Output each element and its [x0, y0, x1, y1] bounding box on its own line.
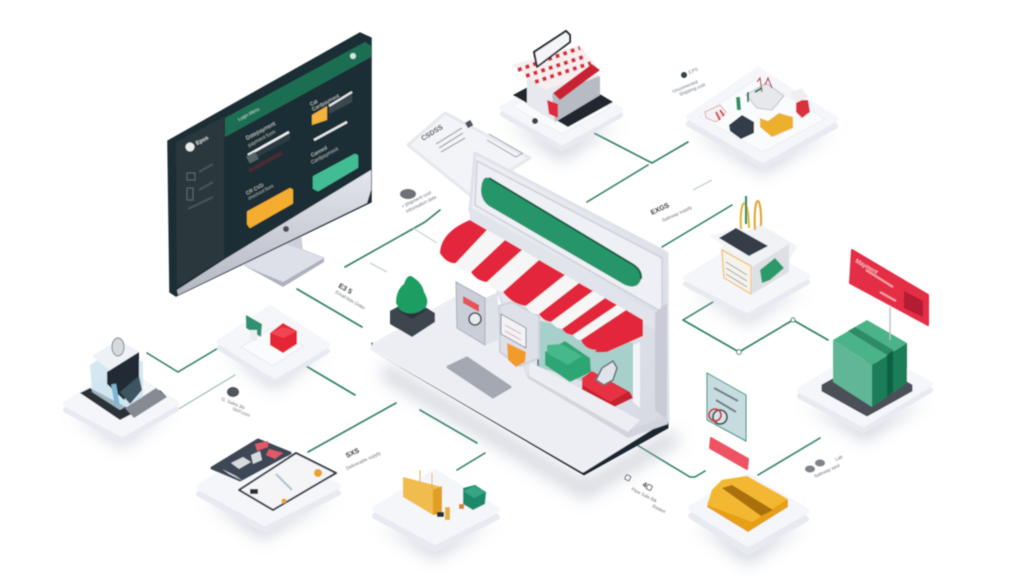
- middle kiosk: [499, 302, 539, 367]
- green button: [314, 155, 357, 190]
- dark base: [80, 388, 166, 420]
- label: top left of store: • Shipment cost: [401, 190, 433, 209]
- monitor body: [168, 33, 371, 296]
- panel: magnifier document: [707, 373, 748, 469]
- label: right of gold: [805, 454, 844, 479]
- label: below store: ▢: [623, 473, 632, 483]
- screen header: [225, 42, 371, 137]
- shop window: [538, 318, 640, 408]
- label: left of store: E3 5: [337, 283, 353, 296]
- label: right of gold: Safeway spot: [813, 462, 841, 479]
- red goods: [582, 371, 633, 408]
- panel: tablet tile: [199, 440, 338, 540]
- payment form left: [245, 121, 290, 201]
- panel: top shop tile: [503, 31, 620, 162]
- small items: [445, 507, 450, 520]
- label: right of gold: Lab: [834, 454, 844, 462]
- label: products: [672, 67, 707, 97]
- store frame: [470, 153, 668, 435]
- yellow button: [248, 189, 292, 227]
- label: below red cube: [221, 387, 251, 418]
- store base: [372, 298, 668, 475]
- text labels: [221, 67, 844, 515]
- payment form right: Cardpayment: [310, 146, 340, 166]
- store shadow: [380, 362, 682, 500]
- monitor: Login Menu: [237, 106, 261, 122]
- green cube: [463, 485, 486, 510]
- label: below store: Basket: [652, 503, 667, 515]
- cables: [741, 203, 749, 229]
- label: products: 2,PS: [688, 67, 699, 75]
- label: above yellow box: Deliverable supply: [345, 450, 382, 471]
- dark box: [729, 115, 754, 139]
- yellow tray: [760, 113, 793, 137]
- label: products: Unconnected: [672, 79, 699, 94]
- label: right of store: Safeway supply: [661, 204, 693, 223]
- green goods: [545, 341, 591, 382]
- label: top left of store: [400, 189, 437, 214]
- grid cart: [746, 83, 784, 110]
- left kiosk: [456, 282, 498, 345]
- label: below store: 4▢: [641, 481, 654, 492]
- green sign: [481, 178, 641, 287]
- panel: gold tile: [691, 476, 806, 565]
- label: products: Shipping cost: [679, 82, 707, 97]
- payment form left: payment form: [247, 129, 277, 149]
- payment form left: Datepayment: [245, 121, 277, 142]
- green box: [833, 320, 907, 365]
- panel: red cube tile: [220, 308, 327, 390]
- label: right of store: EXGS: [650, 202, 671, 217]
- dark slot: [513, 70, 613, 127]
- red bag: [796, 100, 810, 118]
- payment form right: Cat: [309, 99, 319, 108]
- yellow box: [403, 477, 442, 515]
- monitor stand: [244, 225, 324, 287]
- green sign: [246, 315, 262, 337]
- payment form right: [309, 92, 352, 166]
- tablet: [239, 453, 336, 510]
- panel: server tile: [66, 338, 176, 448]
- red card: [850, 250, 928, 325]
- connector lines: [147, 132, 828, 477]
- globe icon: [112, 338, 124, 356]
- plant on pot: [390, 276, 435, 337]
- white and red bag: [705, 105, 726, 122]
- panel: shipping box tile: [800, 250, 930, 442]
- server block: [90, 348, 143, 410]
- orange tag: [507, 343, 526, 367]
- box building: [720, 224, 797, 294]
- label: left of store: Email lists Order: [334, 290, 367, 311]
- gold block: [707, 476, 788, 532]
- red tag: [547, 100, 558, 118]
- dark base: [822, 360, 912, 416]
- panel: top right products tile: [689, 70, 835, 175]
- label: right of store: [650, 202, 693, 223]
- monitor: [168, 33, 371, 296]
- panel: yellow box tile: [375, 470, 497, 560]
- hex ring icon: [596, 361, 617, 385]
- payment form right: Canned: [310, 145, 329, 159]
- sidebar: [176, 117, 224, 287]
- payment form left: CR CVD: [245, 182, 265, 197]
- shop awning: [512, 45, 600, 90]
- shop screen: [534, 31, 570, 67]
- panel: receipt card behind store: [408, 113, 530, 195]
- label: above yellow box: SXS: [345, 447, 361, 460]
- payment form left: checkout form: [247, 183, 275, 201]
- pole: [889, 307, 891, 340]
- label: below red cube: SKP.com: [232, 406, 251, 418]
- red tag: [710, 438, 748, 469]
- monitor: Epos: [195, 135, 210, 147]
- shop building: [527, 58, 600, 122]
- label: below store: [623, 473, 667, 515]
- label: below red cube: G. Sales 3ls: [221, 396, 246, 410]
- main storefront: [372, 153, 682, 500]
- front sill: [528, 372, 668, 438]
- awning: [440, 220, 643, 352]
- green bottle: [738, 97, 739, 110]
- payment form right: Cardpayment: [311, 93, 341, 113]
- red card: Mayment: [854, 259, 879, 276]
- label: below store: Flow Sale Bik: [631, 486, 658, 504]
- red cube: [270, 323, 297, 353]
- label: top left of store: Information data: [405, 194, 437, 214]
- dark dashboard: [212, 440, 290, 480]
- monitor chin: [177, 170, 371, 295]
- panel: store mini tile: [686, 196, 807, 325]
- panel: receipt card behind store: CSDSS: [420, 124, 445, 143]
